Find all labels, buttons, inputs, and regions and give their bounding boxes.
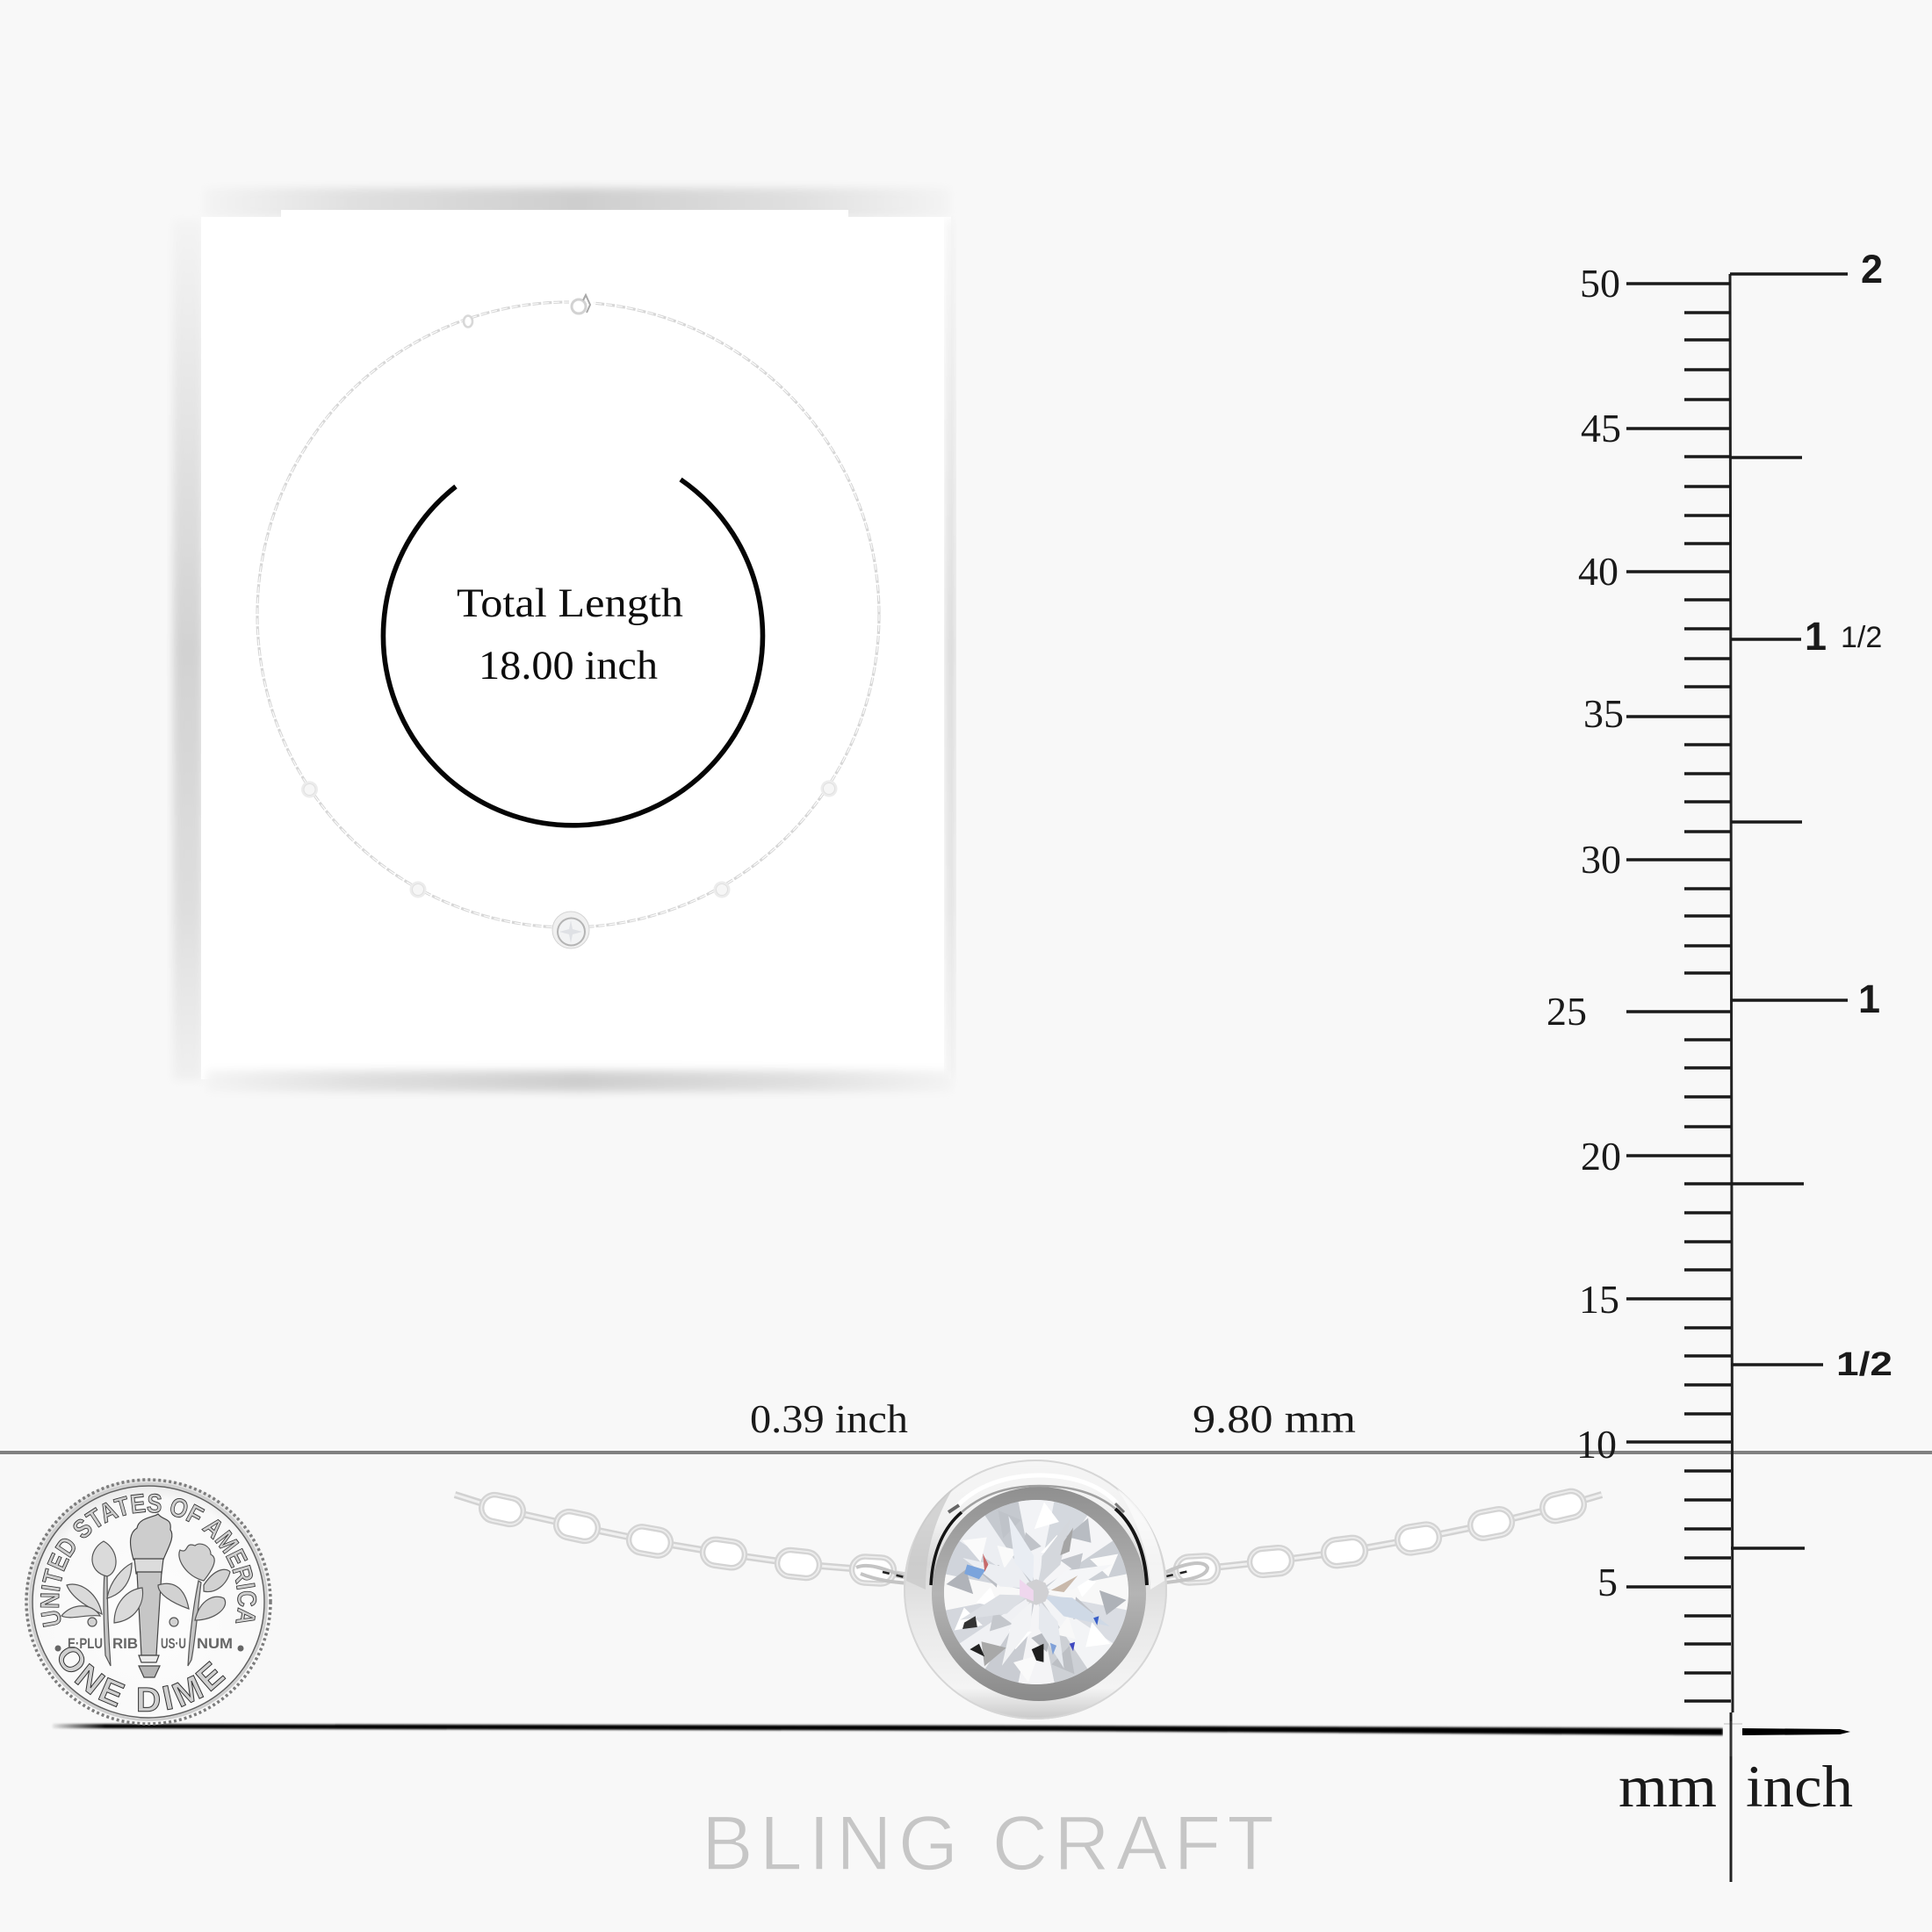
ruler — [1546, 247, 1892, 1882]
icon: bezel pendant with diamond — [904, 1460, 1167, 1719]
brand wordmark: BLING CRAFT — [702, 1799, 1274, 1886]
mm labels: 25 — [1546, 989, 1587, 1034]
diamond facets — [944, 1500, 1128, 1684]
text: width in millimetres: 9.80 mm — [1193, 1396, 1356, 1441]
inch labels: 1/2 — [1836, 1346, 1892, 1383]
mm labels: 15 — [1579, 1277, 1619, 1322]
ruler spine — [1730, 274, 1733, 1882]
baseline — [53, 1724, 1850, 1735]
inch labels: 1/2 — [1841, 621, 1882, 654]
icon: station gem right upper — [820, 780, 838, 797]
icon: small pendant — [552, 912, 589, 948]
inch labels — [1805, 247, 1892, 1383]
coin motto: E·PLU — [68, 1635, 103, 1652]
coin olive branch — [61, 1541, 143, 1666]
mm labels: 45 — [1581, 406, 1621, 451]
icon: one dime coin — [25, 1478, 272, 1726]
inch ticks — [1730, 274, 1848, 1548]
inch labels: 1 — [1805, 614, 1827, 659]
inch labels: 1 — [1858, 977, 1880, 1021]
mm labels: 10 — [1576, 1422, 1617, 1467]
mm minor ticks — [1684, 313, 1731, 1701]
coin lettering bottom: ONE DIME — [58, 1647, 227, 1712]
mm labels: 20 — [1581, 1134, 1621, 1179]
coin oak branch — [88, 1544, 230, 1666]
icon: station gem right lower — [713, 882, 731, 898]
text: total length: Total Length — [457, 580, 683, 626]
icon: clasp — [569, 295, 594, 314]
coin motto — [68, 1635, 233, 1652]
arc: total length loop — [383, 479, 762, 825]
mm labels: 40 — [1578, 549, 1618, 594]
mm labels: 35 — [1583, 691, 1624, 736]
mm labels — [1546, 261, 1624, 1604]
text: 18.00 inch: 18.00 inch — [479, 643, 658, 688]
icon: extender ring — [464, 316, 472, 327]
mm labels: 5 — [1597, 1560, 1618, 1604]
coin motto: US·U — [161, 1635, 186, 1652]
icon: station gem left lower — [409, 882, 427, 898]
coin motto: NUM — [197, 1635, 233, 1652]
coin motto: RIB — [112, 1635, 138, 1652]
panel: necklace total length — [173, 188, 955, 1092]
pendant chain left — [455, 1492, 909, 1584]
horizontal reference line — [0, 1451, 1932, 1454]
baseline gap — [1723, 1721, 1742, 1756]
coin torch — [131, 1514, 172, 1677]
unit label inch: inch — [1746, 1753, 1853, 1820]
inch labels: 2 — [1861, 247, 1883, 292]
necklace chain — [257, 302, 879, 927]
mm labels: 50 — [1580, 261, 1620, 306]
outer small facets — [946, 1502, 1127, 1683]
mm labels: 30 — [1581, 837, 1621, 882]
pendant chain right — [1164, 1489, 1602, 1583]
inner small facets — [980, 1532, 1093, 1652]
coin lettering top: UNITED STATES OF AMERICA — [40, 1493, 256, 1627]
unit label mm: mm — [1618, 1753, 1717, 1820]
mm major ticks — [1626, 284, 1731, 1587]
icon: station gem left upper — [301, 782, 318, 797]
text: width in inches: 0.39 inch — [750, 1396, 908, 1441]
